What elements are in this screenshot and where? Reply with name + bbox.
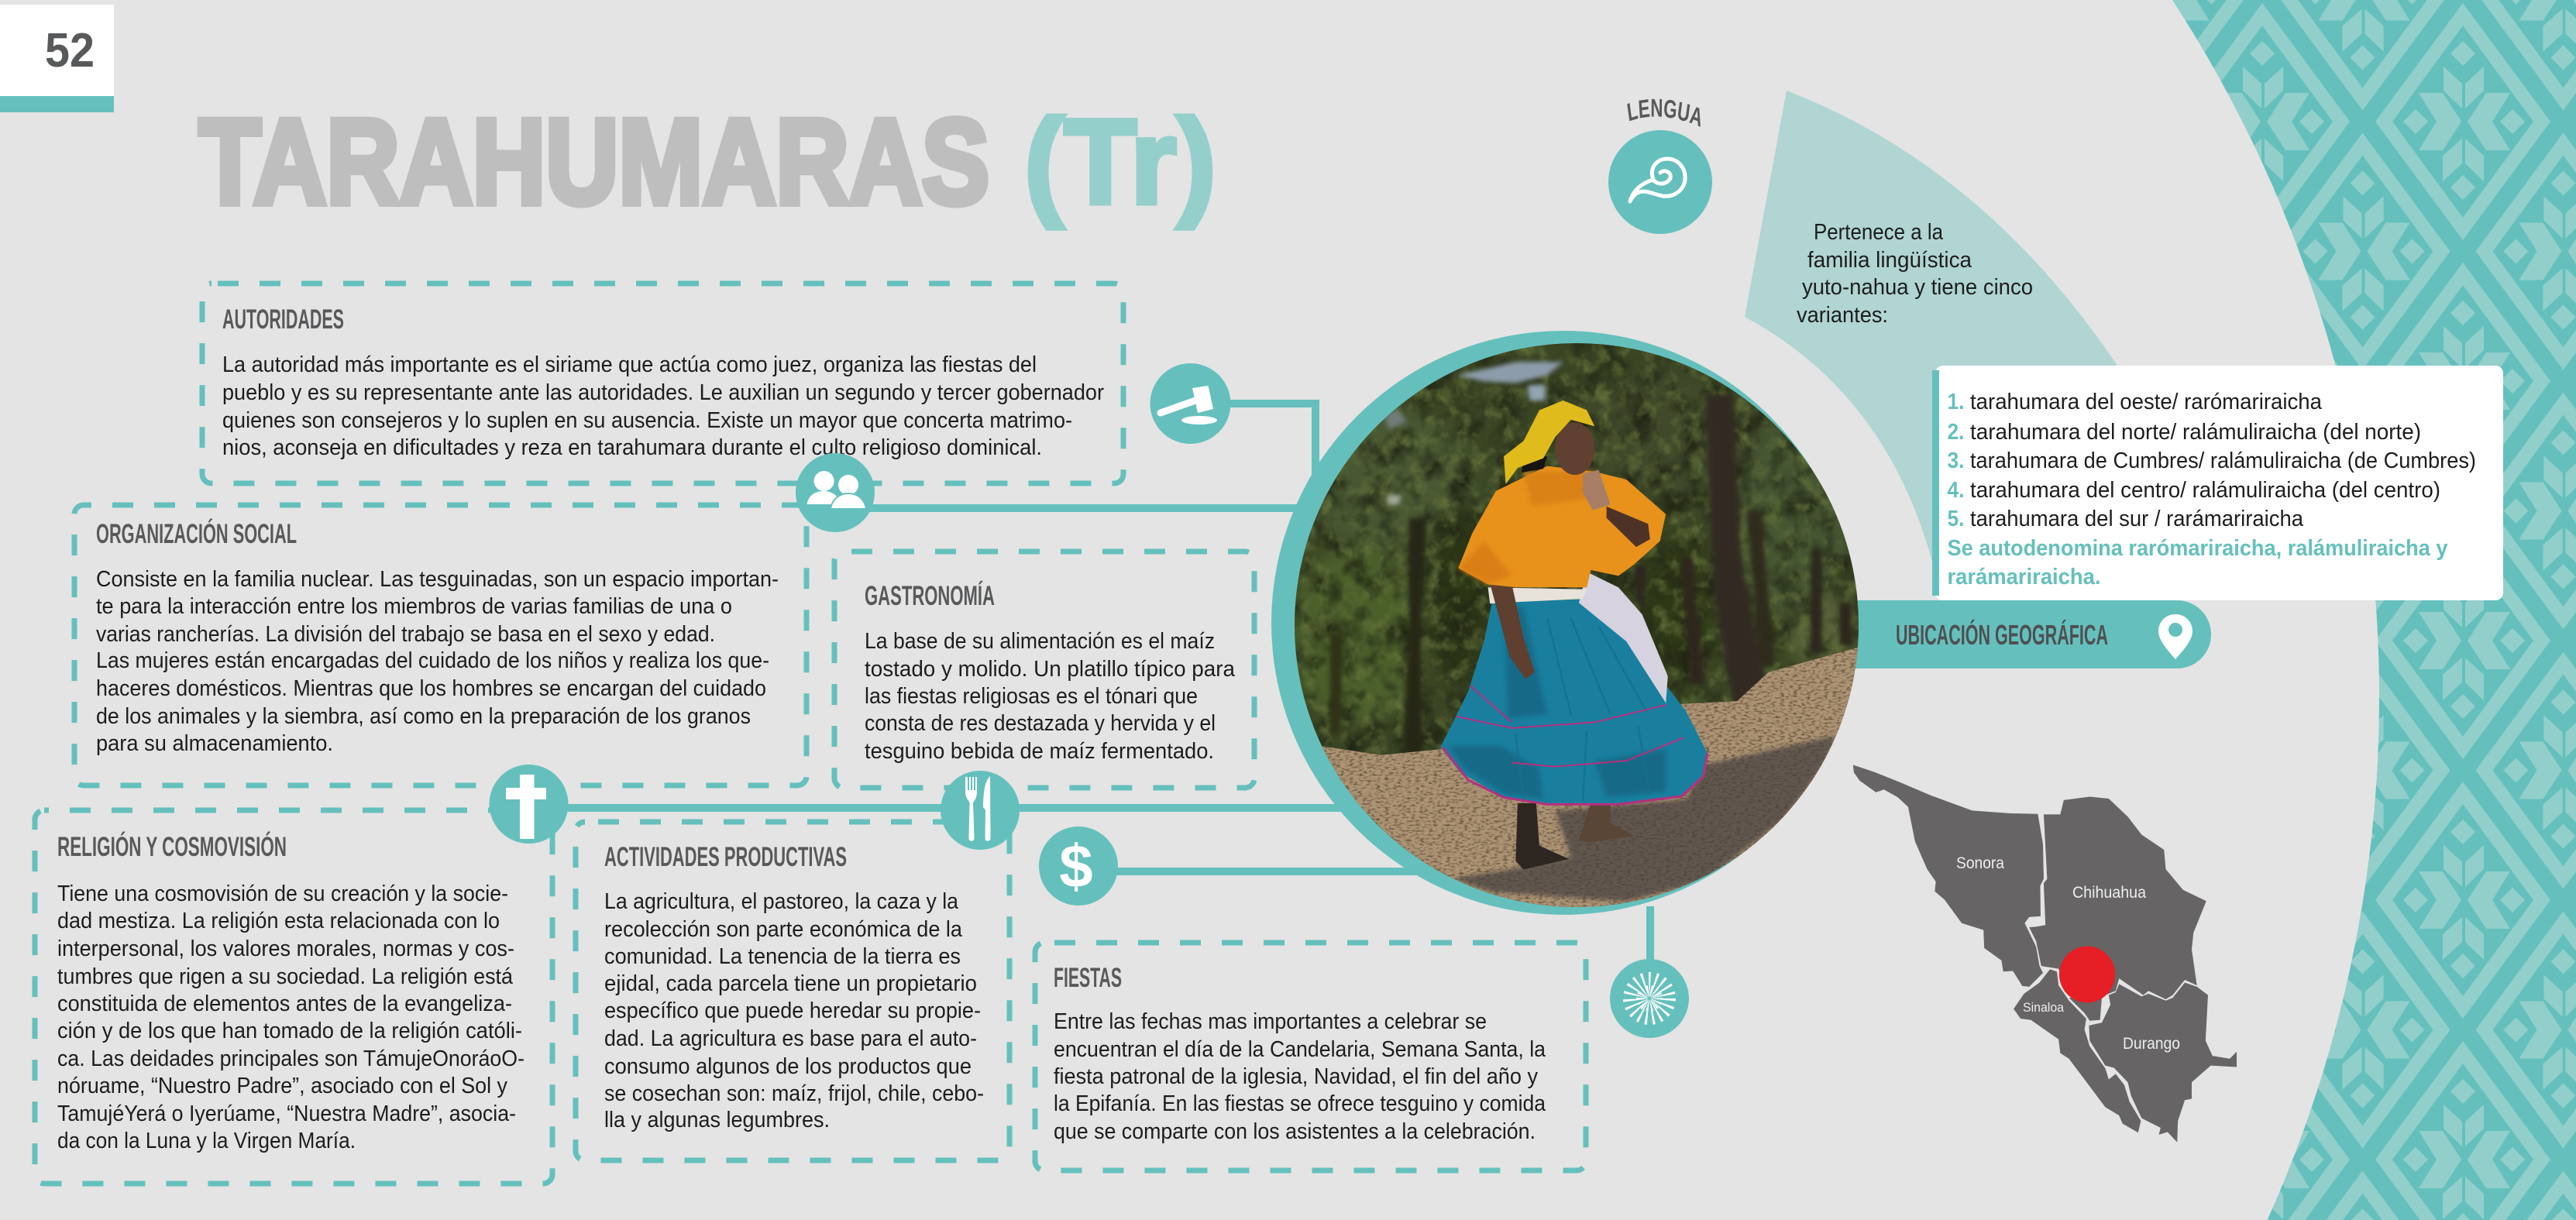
panel: fiestas: FIESTAS — [1054, 963, 1122, 993]
icon: people — [796, 453, 875, 532]
panel: gastronomía: tostado y molido. Un platillo típico para — [865, 657, 1236, 682]
ubicación geográfica pill: UBICACIÓN GEOGRÁFICA — [1896, 618, 2108, 651]
panel: religión y cosmovisión: ca. Las deidades principales son TámujeOnoráoO- — [57, 1046, 524, 1071]
panel: religión y cosmovisión: ción y de los que han tomado de la religión católi- — [57, 1019, 522, 1043]
panel: gastronomía: las fiestas religiosas es el tónari que — [865, 684, 1198, 709]
panel: religión y cosmovisión: tumbres que rigen a su sociedad. La religión está — [57, 964, 514, 989]
panel: autoridades: nios, aconseja en dificultades y reza en tarahumara durante el culto religioso dominical. — [222, 435, 1042, 460]
panel: autoridades: La autoridad más importante es el siriame que actúa como juez, organiza las fiestas del — [222, 352, 1037, 377]
icon: fireworks — [1610, 959, 1689, 1038]
apron — [1579, 572, 1668, 703]
panel: gastronomía — [834, 552, 1254, 788]
panel: autoridades: pueblo y es su representante ante las autoridades. Le auxilian un segundo y tercer gobernador — [222, 380, 1104, 405]
panel: religión y cosmovisión: interpersonal, los valores morales, normas y cos- — [57, 936, 514, 961]
panel: actividades productivas: dad. La agricultura es base para el auto- — [604, 1026, 977, 1051]
sky gaps and tree trunks — [1330, 362, 1852, 753]
panel: gastronomía: tesguino bebida de maíz fermentado. — [865, 739, 1214, 764]
ground — [1316, 647, 1859, 911]
panel: fiestas: que se comparte con los asistentes a la celebración. — [1054, 1119, 1536, 1144]
icon: language swirl — [1608, 130, 1712, 234]
ubicación geográfica pill — [1844, 600, 2211, 668]
forest colour blobs — [1291, 372, 1859, 722]
panel: language variants list: tarahumara del centro/ ralámuliraicha (del centro) — [1970, 478, 2440, 503]
panel: organización social: ORGANIZACIÓN SOCIAL — [96, 518, 297, 549]
panel: actividades productivas: se cosechan son: maíz, frijol, chile, cebo- — [604, 1081, 984, 1106]
language family text: Pertenece a la — [1814, 220, 1944, 245]
map of northwest Mexico: Sonora — [1956, 854, 2004, 872]
icon: location pin — [2158, 614, 2193, 659]
background pattern panel — [2092, 0, 2576, 1220]
panel: religión y cosmovisión: dad mestiza. La religión esta relacionada con lo — [57, 909, 500, 933]
head — [1555, 422, 1594, 475]
panel: actividades productivas: comunidad. La tenencia de la tierra es — [604, 944, 961, 969]
panel: fiestas — [1035, 943, 1586, 1170]
panel: religión y cosmovisión — [35, 810, 552, 1184]
icon: gavel — [1150, 363, 1230, 444]
panel: organización social — [74, 505, 807, 785]
panel: organización social: Las mujeres están encargadas del cuidado de los niños y realiza los que- — [96, 648, 769, 673]
panel: autoridades: AUTORIDADES — [222, 304, 344, 335]
panel: language variants list: tarahumara del norte/ ralámuliraicha (del norte) — [1970, 420, 2421, 445]
map of northwest Mexico: Chihuahua — [2072, 884, 2146, 902]
panel: gastronomía: GASTRONOMÍA — [865, 580, 995, 611]
panel: actividades productivas: lla y algunas legumbres. — [604, 1108, 830, 1132]
map of northwest Mexico — [1853, 765, 2237, 1143]
arm right and hand — [1607, 507, 1650, 547]
panel: fiestas: la Epifanía. En las fiestas se ofrece tesguino y comida — [1054, 1091, 1546, 1116]
language family text: variantes: — [1797, 303, 1888, 328]
panel: gastronomía: consta de res destazada y hervida y el — [865, 711, 1216, 736]
panel: fiestas: encuentran el día de la Candelaria, Semana Santa, la — [1054, 1037, 1546, 1062]
legs — [1515, 803, 1569, 869]
icon: fork and knife — [941, 771, 1020, 850]
panel: religión y cosmovisión: TamujéYerá o Iyerúame, “Nuestra Madre”, asocia- — [57, 1101, 516, 1126]
map of northwest Mexico: Durango — [2123, 1035, 2180, 1053]
panel: gastronomía: La base de su alimentación es el maíz — [865, 629, 1215, 654]
language family text: familia lingüística — [1807, 248, 1972, 273]
panel: fiestas: Entre las fechas mas importantes a celebrar se — [1054, 1009, 1487, 1034]
blouse — [1458, 466, 1666, 587]
panel: autoridades: quienes son consejeros y lo suplen en su ausencia. Existe un mayor que concerta matrimo- — [222, 408, 1072, 433]
icon: dollar: $ — [1059, 832, 1093, 900]
panel: organización social: varias rancherías. La división del trabajo se basa en el sexo y edad. — [96, 622, 715, 647]
panel: language variants list: tarahumara del sur / rarámariraicha — [1970, 507, 2304, 531]
panel: autoridades — [202, 284, 1123, 483]
map of northwest Mexico: Sinaloa — [2023, 1000, 2065, 1015]
language family text: yuto-nahua y tiene cinco — [1802, 275, 2033, 300]
panel: language variants list: 1. — [1948, 390, 1965, 414]
panel: actividades productivas: específico que puede heredar su propie- — [604, 998, 981, 1023]
panel: language variants list: rarámariraicha. — [1948, 565, 2101, 589]
panel: language variants list — [1932, 366, 2503, 600]
foliage texture — [1286, 341, 1867, 914]
page number tab: 52 — [45, 24, 95, 77]
panel: actividades productivas: recolección son parte económica de la — [604, 917, 963, 942]
panel: language variants list: 2. — [1948, 420, 1965, 445]
language fan shape — [1745, 91, 2117, 573]
icon: dollar — [1039, 827, 1118, 906]
skirt — [1440, 599, 1708, 803]
panel: organización social: te para la interacción entre los miembros de varias familias de una o — [96, 594, 732, 619]
panel: religión y cosmovisión: RELIGIÓN Y COSMOVISIÓN — [57, 831, 287, 862]
panel: organización social: de los animales y la siembra, así como en la preparación de los granos — [96, 704, 751, 729]
lengua heading: LENGUA — [1627, 99, 1701, 127]
panel: fiestas: fiesta patronal de la iglesia, Navidad, el fin del año y — [1054, 1064, 1538, 1089]
waist band — [1488, 587, 1587, 603]
panel: actividades productivas — [576, 822, 1009, 1160]
photo of Tarahumara woman in ring — [1271, 331, 1867, 915]
panel: religión y cosmovisión: Tiene una cosmovisión de su creación y la socie- — [57, 881, 508, 906]
panel: language variants list: 3. — [1948, 448, 1965, 473]
panel: organización social: Consiste en la familia nuclear. Las tesguinadas, son un espacio importan- — [96, 567, 779, 592]
panel: language variants list: tarahumara de Cumbres/ ralámuliraicha (de Cumbres) — [1970, 448, 2476, 473]
panel: actividades productivas: La agricultura, el pastoreo, la caza y la — [604, 889, 959, 914]
panel: language variants list: Se autodenomina rarómariraicha, ralámuliraicha y — [1948, 536, 2448, 561]
panel: actividades productivas: consumo algunos de los productos que — [604, 1054, 972, 1079]
panel: actividades productivas: ejidal, cada parcela tiene un propietario — [604, 971, 977, 996]
language family text — [1797, 220, 2033, 328]
connector lines — [528, 404, 1650, 968]
panel: language variants list: 5. — [1948, 507, 1965, 531]
arm left — [1490, 583, 1535, 679]
panel: religión y cosmovisión: nóruame, “Nuestro Padre”, asociado con el Sol y — [57, 1074, 507, 1098]
title: TARAHUMARAS — [199, 95, 989, 229]
panel: religión y cosmovisión: da con la Luna y la Virgen María. — [57, 1129, 356, 1153]
panel: organización social: para su almacenamiento. — [96, 731, 333, 756]
panel: organización social: haceres domésticos. Mientras que los hombres se encargan del cuidado — [96, 676, 766, 701]
panel: religión y cosmovisión: constituida de elementos antes de la evangeliza- — [57, 991, 512, 1016]
page number tab — [0, 5, 114, 112]
title: (Tr) — [1024, 95, 1216, 229]
red location marker — [2059, 947, 2115, 1002]
panel: actividades productivas: ACTIVIDADES PRODUCTIVAS — [604, 842, 847, 872]
icon: cross — [490, 765, 569, 844]
panel: language variants list: tarahumara del oeste/ rarómariraicha — [1970, 390, 2323, 414]
panel: language variants list: 4. — [1948, 478, 1965, 503]
